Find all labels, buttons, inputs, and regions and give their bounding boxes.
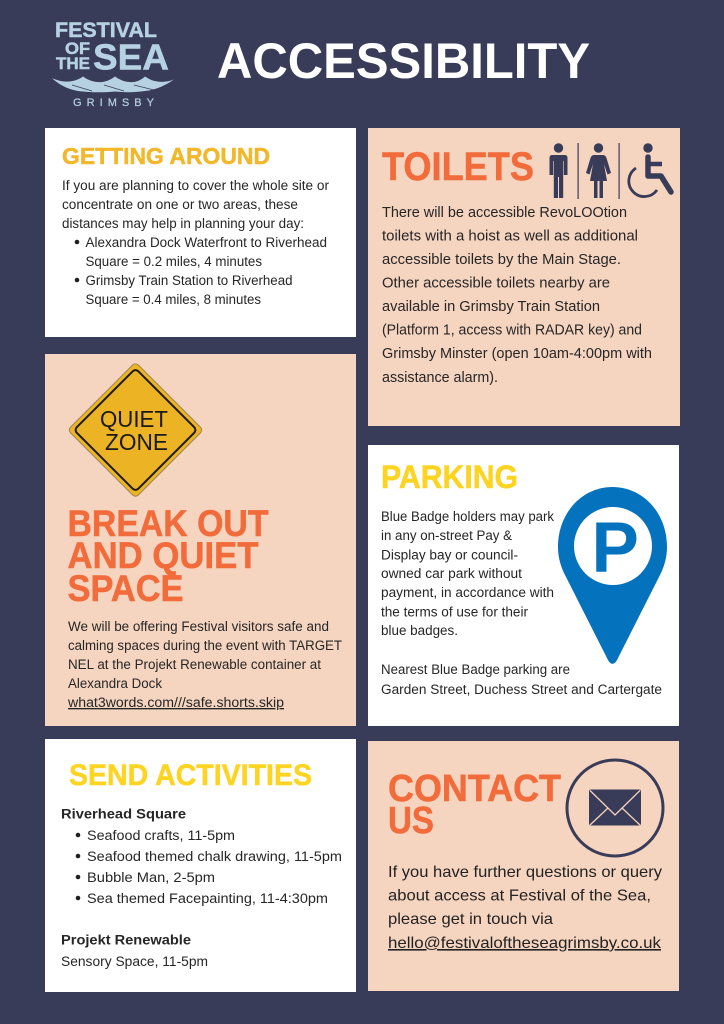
list: distances: Alexandra Dock Waterfront to Riverhead bbox=[86, 235, 327, 250]
text block: getting around intro bbox=[62, 178, 330, 231]
text block: contact: about access at Festival of the Sea, bbox=[388, 888, 651, 904]
logo: Festival of the Sea Grimsby: THE bbox=[56, 55, 90, 73]
text block: toilets: (Platform 1, access with RADAR key) and bbox=[382, 322, 642, 338]
list: riverhead square: Riverhead Square bbox=[61, 806, 187, 822]
icon: quiet zone sign bbox=[68, 362, 203, 498]
text block: contact bbox=[388, 864, 662, 952]
text block: getting around intro: distances may help in planning your day: bbox=[62, 216, 304, 231]
text block: break out: what3words.com///safe.shorts.skip bbox=[67, 695, 284, 710]
text block: parking: owned car park without bbox=[381, 566, 522, 581]
list: distances: Square = 0.2 miles, 4 minutes bbox=[86, 254, 262, 269]
icon: quiet zone sign: QUIET bbox=[100, 406, 168, 432]
icon: man bbox=[550, 143, 568, 198]
panel: getting around bbox=[45, 128, 356, 337]
heading: contact us bbox=[388, 768, 561, 842]
text block: parking: payment, in accordance with bbox=[381, 585, 554, 600]
text block: toilets: There will be accessible RevoLOOtion bbox=[382, 205, 627, 221]
text block: parking bbox=[381, 509, 662, 697]
list: riverhead square: Bubble Man, 2-5pm bbox=[87, 870, 215, 885]
text block: parking: Blue Badge holders may park bbox=[381, 509, 554, 524]
divider: toilets two bbox=[618, 143, 620, 199]
icon: envelope in circle bbox=[567, 760, 663, 856]
icon: wheelchair bbox=[629, 143, 671, 197]
heading: getting around: GETTING AROUND bbox=[62, 143, 270, 169]
text block: toilets: available in Grimsby Train Station bbox=[382, 299, 600, 315]
logo: Festival of the Sea Grimsby: FESTIVAL bbox=[55, 18, 157, 42]
panel: break out and quiet space bbox=[45, 354, 356, 726]
text block: contact: hello@festivaloftheseagrimsby.co.uk bbox=[388, 935, 662, 952]
text block: parking: blue badges. bbox=[381, 623, 458, 638]
text block: getting around intro: If you are planning to cover the whole site or bbox=[62, 178, 330, 193]
text block: break out: We will be offering Festival visitors safe and bbox=[68, 619, 329, 634]
heading: break out and quiet space: AND QUIET bbox=[68, 535, 259, 576]
logo: Festival of the Sea Grimsby: GRIMSBY bbox=[73, 97, 155, 109]
list: riverhead square: Sea themed Facepainting, 11-4:30pm bbox=[87, 891, 328, 906]
text block: projekt renewable bbox=[61, 932, 208, 969]
logo: Festival of the Sea Grimsby: SEA bbox=[93, 36, 169, 78]
heading: break out and quiet space bbox=[68, 503, 269, 609]
heading: parking: PARKING bbox=[381, 459, 518, 495]
list: riverhead square bbox=[61, 806, 342, 906]
panel: parking bbox=[368, 445, 679, 726]
text block: getting around intro: concentrate on one or two areas, these bbox=[62, 197, 298, 212]
text block: contact: please get in touch via bbox=[388, 911, 553, 928]
text block: parking: in any on-street Pay & bbox=[381, 528, 512, 543]
logo: Festival of the Sea Grimsby: OF bbox=[65, 40, 90, 58]
list: riverhead square: Seafood themed chalk drawing, 11-5pm bbox=[87, 849, 342, 864]
heading: contact us: CONTACT bbox=[388, 768, 561, 810]
divider: toilets one bbox=[578, 143, 579, 199]
panel: contact us bbox=[368, 741, 679, 991]
logo: Festival of the Sea Grimsby bbox=[52, 18, 174, 109]
text block: toilets: Grimsby Minster (open 10am-4:00pm with bbox=[382, 346, 652, 362]
text block: projekt renewable: Projekt Renewable bbox=[61, 932, 192, 948]
text block: toilets: Other accessible toilets nearby are bbox=[382, 276, 610, 292]
list: distances: Grimsby Train Station to Riverhead bbox=[86, 273, 292, 288]
text block: parking: Nearest Blue Badge parking are bbox=[381, 662, 570, 677]
heading: send activities: SEND ACTIVITIES bbox=[69, 759, 312, 792]
text block: break out: calming spaces during the event with TARGET bbox=[68, 638, 342, 653]
title: ACCESSIBILITY bbox=[217, 33, 590, 89]
text block: break out: NEL at the Projekt Renewable container at bbox=[68, 657, 321, 672]
heading: break out and quiet space: SPACE bbox=[68, 568, 184, 609]
text block: parking: Display bay or council- bbox=[381, 548, 518, 562]
text block: projekt renewable: Sensory Space, 11-5pm bbox=[61, 954, 208, 969]
text block: parking: the terms of use for their bbox=[381, 604, 529, 620]
heading: toilets: TOILETS bbox=[382, 145, 534, 189]
text block: toilets: toilets with a hoist as well as additional bbox=[382, 228, 638, 244]
heading: break out and quiet space: BREAK OUT bbox=[68, 503, 269, 544]
panel: toilets bbox=[368, 128, 680, 426]
icon: parking pin bbox=[558, 487, 667, 664]
icon: woman bbox=[586, 143, 611, 198]
text block: toilets bbox=[382, 205, 652, 386]
heading: contact us: US bbox=[388, 800, 434, 842]
text block: break out bbox=[67, 619, 342, 710]
list: distances: Square = 0.4 miles, 8 minutes bbox=[86, 292, 261, 307]
panel: send activities bbox=[45, 739, 356, 992]
icon: parking pin: P bbox=[592, 509, 639, 588]
text block: toilets: assistance alarm). bbox=[382, 370, 498, 386]
list: distances bbox=[75, 235, 327, 307]
list: riverhead square: Seafood crafts, 11-5pm bbox=[87, 828, 235, 843]
icon: quiet zone sign: ZONE bbox=[105, 429, 168, 455]
text block: contact: If you have further questions or query bbox=[388, 864, 662, 881]
text block: toilets: accessible toilets by the Main Stage. bbox=[382, 252, 621, 268]
text block: break out: Alexandra Dock bbox=[68, 676, 162, 691]
text block: parking: Garden Street, Duchess Street and Cartergate bbox=[381, 682, 662, 697]
